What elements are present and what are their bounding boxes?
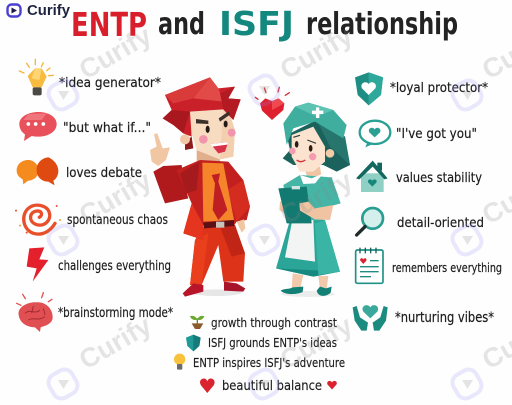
icon: shield with heart <box>355 72 383 105</box>
icon: notepad checklist <box>356 248 383 283</box>
icon: sprout <box>190 316 204 329</box>
text: growth through contrast: growth through contrast <box>211 315 337 330</box>
icon: hands holding heart <box>353 305 388 331</box>
body <box>153 160 250 297</box>
icon: lightning bolt <box>27 247 48 282</box>
icon: house with heart <box>356 161 388 192</box>
watermarks: Curify <box>74 165 157 230</box>
brand logo: Curify <box>8 3 70 19</box>
panel: ISFJ traits <box>353 72 502 331</box>
head <box>283 103 350 181</box>
title: relationship <box>306 7 458 42</box>
text: idea generator: *idea generator* <box>59 75 161 91</box>
icon: red heart <box>200 378 215 393</box>
icon: small bulb <box>174 354 185 370</box>
text: spontaneous chaos: spontaneous chaos <box>67 212 168 228</box>
raised hand <box>150 133 170 166</box>
title: ENTP <box>71 5 147 44</box>
title: ISFJ <box>219 4 294 43</box>
text: beautiful balance: beautiful balance <box>222 378 322 394</box>
body <box>276 173 341 297</box>
figure: ENTP man <box>150 77 250 297</box>
panel: relationship summary <box>174 315 345 394</box>
icon: debate bubbles <box>17 157 58 185</box>
watermarks: Curify <box>275 310 358 375</box>
text: ISFJ grounds ENTP's ideas: ISFJ grounds ENTP's ideas <box>208 336 337 350</box>
icon: chat bubble with heart <box>360 121 390 147</box>
brand logo: Curify: Curify <box>27 3 70 19</box>
text: values stability: values stability <box>396 170 482 186</box>
text: detail-oriented: detail-oriented <box>397 215 484 231</box>
head <box>163 77 241 173</box>
watermarks: Curify <box>74 310 157 375</box>
icon: light bulb <box>19 59 53 95</box>
title: and <box>158 7 205 42</box>
text: I've got you: "I've got you" <box>396 126 477 142</box>
text: but what if: "but what if..." <box>63 120 151 136</box>
text: ENTP inspires ISFJ's adventure: ENTP inspires ISFJ's adventure <box>193 356 345 370</box>
text: loyal protector: *loyal protector* <box>390 80 488 96</box>
figure: ISFJ nurse <box>276 103 350 297</box>
watermarks: Curify <box>275 165 358 230</box>
icon: chaos swirl <box>15 205 61 234</box>
icon: speech bubble <box>19 112 57 141</box>
panel: ENTP traits <box>15 59 173 332</box>
text: loves debate: loves debate <box>66 165 142 181</box>
watermarks: Curify <box>275 20 358 85</box>
icon: floating heart <box>255 87 289 120</box>
icon: magnifying glass <box>357 208 383 235</box>
text: brainstorming mode: *brainstorming mode* <box>58 305 173 321</box>
title <box>71 4 458 44</box>
icon: brain <box>17 293 53 332</box>
text: challenges everything: challenges everything <box>58 258 171 274</box>
watermarks: Curify <box>74 20 157 85</box>
icon: small heart <box>327 381 337 390</box>
icon: small shield <box>186 335 201 351</box>
